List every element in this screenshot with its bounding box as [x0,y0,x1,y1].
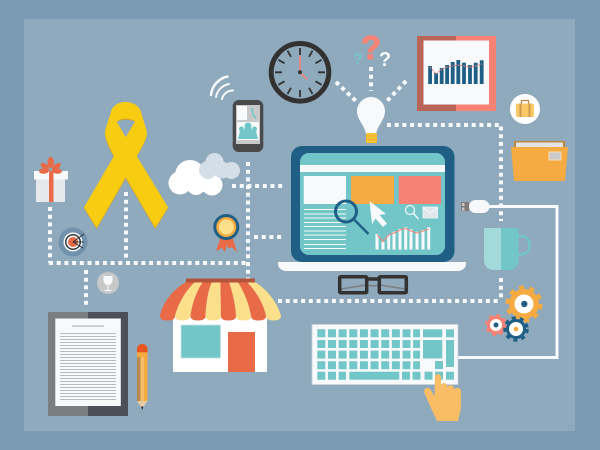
icon: USB plug [461,200,490,213]
icon: smartphone [233,100,263,152]
icon: gears [487,288,540,340]
icon: eyeglasses [340,277,406,293]
icon: wall clock [271,44,329,101]
icon: question marks [353,29,391,71]
icon: wifi waves [211,76,233,99]
icon: framed bar chart [417,36,496,111]
screen bar chart [376,227,430,250]
icon: pencil [137,344,148,410]
icon: wine glass badge [97,272,119,294]
icon: pointing hand [424,374,461,421]
icon: medal [213,214,239,252]
icon: question marks: ? [353,51,363,68]
USB cable line [456,206,557,358]
screen panels [304,176,441,204]
icon: light bulb [357,97,385,143]
salmon gear [487,316,505,334]
blue gear [506,318,526,340]
icon: yellow ribbon [84,102,168,229]
orange gear [508,288,540,320]
icon: target [58,228,88,256]
dotted connector network [49,67,501,308]
icon: tablet with document [48,312,128,416]
icon: keyboard [312,324,458,384]
icon: question marks: ? [379,49,391,71]
icon: coffee mug [484,228,530,270]
icon: orange folder [511,141,568,181]
icon: clouds [168,153,240,196]
screen text lines [304,210,346,248]
icon: briefcase badge [510,94,540,124]
icon: shop [160,278,281,372]
icon: question marks: ? [361,29,381,66]
icon: laptop [278,146,466,271]
small search icon [406,206,418,219]
magnifying glass [336,201,368,234]
awning [160,282,281,320]
arrow cursor [370,201,387,227]
icon: gift box [34,157,68,202]
envelope icon [423,207,438,218]
